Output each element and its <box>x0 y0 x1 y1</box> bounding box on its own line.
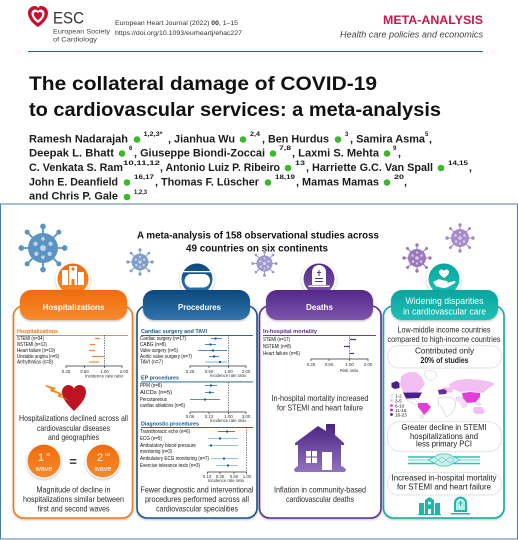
text: fewer procedures: procedures performed across all <box>145 495 249 504</box>
text: hospitalizations declined: Hospitalizations declined across all <box>19 414 128 423</box>
icon: stent <box>408 454 480 466</box>
text: comparison <box>388 326 500 344</box>
authors: Ramesh Nadarajah <box>29 134 128 146</box>
header bar: Widening disparities <box>406 296 484 306</box>
text: hospitalizations declined: and geographies <box>48 433 99 442</box>
second wave circle: nd <box>105 452 110 457</box>
forest plot: EP procedures: AICDs (n=5) <box>140 390 172 396</box>
forest plot: cardiac surgery and TAVI: Incidence rate ratio <box>210 373 247 378</box>
forest plot: EP procedures: 0.12 <box>205 414 214 419</box>
forest plot: diagnostic procedures: Ambulatory ECG monitoring (n=7) <box>140 456 209 462</box>
text: fewer procedures: cardiovascular specialities <box>156 504 238 514</box>
authors: , <box>469 162 472 174</box>
forest plot: cardiac surgery and TAVI: TAVI (n=7) <box>140 360 163 366</box>
forest plot: diagnostic procedures: Diagnostic procedures <box>141 422 199 428</box>
forest plot: EP procedures: 1.00 <box>224 414 233 419</box>
callout: contributed only: Contributed only <box>415 346 475 356</box>
forest plot: cardiac surgery and TAVI: 2.00 <box>242 369 251 374</box>
text: comparison: Low-middle income countries <box>398 326 490 334</box>
icon: hospital <box>56 262 90 296</box>
journal citation: European Heart Journal (2022) 00, 1–15 <box>115 20 239 27</box>
authors: 20 <box>394 175 405 181</box>
forest plot: diagnostic procedures: Incidence rate ratio <box>208 478 245 483</box>
text: in-hospital mortality increased: for STEMI and heart failure <box>277 404 363 412</box>
article type <box>340 15 483 40</box>
authors: 18,19 <box>275 175 296 181</box>
forest plot: hospitalizations: STEMI (n=34) <box>17 336 44 342</box>
forest plot: diagnostic procedures <box>140 422 253 483</box>
authors: , Samira Asma <box>350 134 425 146</box>
map legend: 16-23 <box>395 412 407 417</box>
authors: , <box>404 176 407 188</box>
callout: contributed only: 20% of studies <box>420 356 469 365</box>
forest plot: cardiac surgery and TAVI: 1.00 <box>224 369 233 374</box>
forest plot: cardiac surgery and TAVI: Valve surgery (n=5) <box>140 348 178 354</box>
forest plot: cardiac surgery and TAVI: Aortic valve surgery (n=7) <box>140 354 192 360</box>
icon: hospital teal <box>418 497 441 515</box>
authors <box>29 132 472 202</box>
panel: hospitalizations <box>14 262 132 518</box>
authors: , <box>429 134 432 146</box>
world map <box>392 370 495 418</box>
forest plot: cardiac surgery and TAVI: CABG (n=8) <box>140 342 166 348</box>
forest plot: in-hospital mortality: 0.25 <box>307 362 316 367</box>
forest plot: in-hospital mortality: NSTEMI (n=8) <box>263 344 291 350</box>
title <box>29 73 441 121</box>
first wave circle: 1 <box>38 452 44 464</box>
map legend: 1-2 <box>395 393 402 398</box>
forest plot: hospitalizations: Arrhythmias (n=8) <box>17 360 53 366</box>
text: hospitalizations declined <box>19 414 128 442</box>
header bar <box>20 290 127 320</box>
authors: , Harriette G.C. Van Spall <box>306 162 433 174</box>
forest plot: diagnostic procedures: Exercise tolerance tests (n=3) <box>140 463 200 469</box>
authors: , Antonio Luiz P. Ribeiro <box>160 162 281 174</box>
authors: 16,17 <box>134 175 155 181</box>
callout: greater decline: Greater decline in STEMI <box>402 423 486 432</box>
article type: META-ANALYSIS <box>383 15 483 27</box>
forest plot: EP procedures: PPM (n=8) <box>140 383 162 389</box>
forest plot: in-hospital mortality: STEMI (n=17) <box>263 337 290 343</box>
authors: 7,8 <box>279 146 292 152</box>
graphical abstract frame <box>0 204 518 539</box>
icon: heart with lightning bolt <box>45 385 86 411</box>
text: community deaths: cardiovascular deaths <box>286 495 354 504</box>
text: community deaths: Inflation in community-based <box>274 486 366 494</box>
header: ESC logo <box>28 6 111 44</box>
authors: 5 <box>425 132 429 138</box>
authors: , Mamas Mamas <box>296 176 379 188</box>
title: The collateral damage of COVID-19 <box>29 73 377 95</box>
panel: procedures <box>137 262 257 518</box>
forest plot: cardiac surgery and TAVI: 0.50 <box>205 369 214 374</box>
heading: A meta-analysis of 158 observational studies across <box>137 230 379 242</box>
authors: Deepak L. Bhatt <box>29 148 114 160</box>
forest plot: EP procedures <box>140 376 253 423</box>
authors: 14,15 <box>448 161 469 167</box>
journal citation: https://doi.org/10.1093/eurheartj/ehac227 <box>115 30 243 37</box>
forest plot: diagnostic procedures: Ambulatory blood pressure <box>140 443 196 449</box>
panel: widening disparities <box>384 262 504 518</box>
forest plot: cardiac surgery and TAVI <box>140 329 253 378</box>
text: magnitude of decline: Magnitude of decline in <box>36 486 111 494</box>
forest plot: diagnostic procedures: ECG (n=9) <box>140 436 162 442</box>
forest plot: hospitalizations: Unstable angina (n=9) <box>17 354 59 360</box>
forest plot: diagnostic procedures: monitoring (n=3) <box>140 449 172 455</box>
authors: 1,2,3* <box>144 132 163 138</box>
forest plot: diagnostic procedures: 1.00 <box>243 474 252 479</box>
forest plot: EP procedures: Percutaneous <box>140 397 167 403</box>
forest plot: hospitalizations: 0.50 <box>80 369 89 374</box>
text: community deaths <box>274 486 366 504</box>
journal citation <box>115 20 243 37</box>
second wave circle: wave <box>94 464 111 473</box>
map legend: 6-10 <box>395 403 405 408</box>
authors: 3 <box>345 132 349 138</box>
header: ESC logo: ESC <box>53 8 84 28</box>
forest plot: EP procedures: 0.06 <box>186 414 195 419</box>
header bar: Deaths <box>306 302 333 312</box>
authors: 9 <box>393 146 397 152</box>
authors: and Chris P. Gale <box>29 190 118 202</box>
forest plot: hospitalizations: 0.25 <box>62 369 71 374</box>
text: in-hospital mortality increased <box>272 394 369 412</box>
header: ESC logo: European Society <box>53 28 111 36</box>
icon: hand holding heart <box>426 262 462 296</box>
forest plot: in-hospital mortality <box>263 329 376 373</box>
forest plot: hospitalizations: Hospitalizations <box>17 329 58 335</box>
text: magnitude of decline <box>23 486 124 514</box>
authors: , Laxmi S. Mehta <box>292 148 379 160</box>
callout: increased mortality <box>388 472 502 495</box>
forest plot: diagnostic procedures: 0.13 <box>203 474 212 479</box>
authors: , Thomas F. Lüscher <box>155 176 259 188</box>
callout: increased mortality: Increased in-hospital mortality <box>392 474 497 482</box>
text: hospitalizations declined: cardiovascular diseases <box>37 424 110 433</box>
forest plot: hospitalizations: Heart failure (n=19) <box>17 348 55 354</box>
header bar <box>391 290 498 320</box>
header: ESC logo: of Cardiology <box>53 36 98 44</box>
authors: , Jianhua Wu <box>168 134 235 146</box>
text: magnitude of decline: first and second waves <box>38 504 110 514</box>
forest plot: EP procedures: cardiac ablations (n=5) <box>140 403 185 409</box>
map legend <box>390 393 407 417</box>
forest plot: EP procedures: EP procedures <box>141 376 179 382</box>
icon: small blue virus <box>126 248 154 276</box>
forest plot: hospitalizations: NSTEMI (n=12) <box>17 342 47 348</box>
heading <box>137 230 379 254</box>
icon: catheter <box>180 262 214 296</box>
callout: increased mortality: for STEMI and heart failure <box>397 482 491 492</box>
forest plot: hospitalizations: 2.00 <box>120 369 129 374</box>
forest plot: in-hospital mortality: Heart failure (n=6) <box>263 351 300 357</box>
text: magnitude of decline: hospitalizations similar between <box>23 495 124 504</box>
forest plot: diagnostic procedures: 0.25 <box>216 474 225 479</box>
forest plot: hospitalizations: Incidence rate ratio <box>85 374 124 378</box>
authors: 6 <box>129 146 133 152</box>
first wave circle: st <box>46 452 50 457</box>
heading: 49 countries on six continents <box>186 242 328 254</box>
icon: purple virus <box>445 223 475 253</box>
header bar <box>143 290 250 320</box>
first wave circle <box>27 444 61 478</box>
map legend: 3-5 <box>395 398 402 403</box>
forest plot: in-hospital mortality: 2.00 <box>364 362 373 367</box>
forest plot: in-hospital mortality: Risk ratio <box>340 368 359 373</box>
authors: , Ben Hurdus <box>262 134 329 146</box>
text: comparison: compared to high-income countries <box>388 335 500 344</box>
authors: 13 <box>295 161 306 167</box>
forest plot: in-hospital mortality: 1.00 <box>345 362 354 367</box>
text: fewer procedures <box>140 486 254 514</box>
forest plot: hospitalizations: 1.00 <box>100 369 109 374</box>
panel: deaths <box>260 262 381 518</box>
header bar: in cardiovascular care <box>403 306 486 316</box>
text: in-hospital mortality increased: In-hospital mortality increased <box>272 394 369 403</box>
authors: 10,11,12 <box>123 161 161 167</box>
authors: , <box>398 148 401 160</box>
forest plot: in-hospital mortality: In-hospital mortality <box>263 329 318 335</box>
icon: house <box>294 424 346 472</box>
map legend: 11-15 <box>395 408 407 413</box>
forest plot: EP procedures: Incidence rate ratio <box>210 418 247 423</box>
authors: , Giuseppe Biondi-Zoccai <box>134 148 265 160</box>
icon: small periwinkle virus <box>251 250 278 277</box>
icon: purple virus lower <box>402 243 432 273</box>
forest plot: hospitalizations <box>16 329 129 378</box>
callout: greater decline: hospitalizations and <box>410 432 478 441</box>
forest plot: diagnostic procedures: Transthoracic echo (n=6) <box>140 429 190 435</box>
header bar: Procedures <box>178 302 221 312</box>
equals sign: = <box>69 454 77 469</box>
second wave circle <box>86 444 120 478</box>
icon: tombstone teal <box>451 497 470 514</box>
callout: greater decline <box>388 422 502 452</box>
forest plot: cardiac surgery and TAVI: Cardiac surgery (n=17) <box>140 336 186 342</box>
header bar <box>266 290 373 320</box>
callout: greater decline: less primary PCI <box>416 440 472 448</box>
icon: large virus <box>18 224 68 272</box>
forest plot: cardiac surgery and TAVI: Cardiac surgery and TAVI <box>141 329 207 335</box>
forest plot: diagnostic procedures: 0.50 <box>230 474 239 479</box>
article type: Health care policies and economics <box>340 30 483 40</box>
authors: 1,2,3 <box>134 190 148 196</box>
callout: contributed only <box>388 346 502 368</box>
authors: John E. Deanfield <box>29 176 118 188</box>
authors: C. Venkata S. Ram <box>29 162 123 174</box>
forest plot: EP procedures: 3.00 <box>242 414 251 419</box>
first wave circle: wave <box>35 464 52 473</box>
forest plot: cardiac surgery and TAVI: 0.25 <box>186 369 195 374</box>
icon: tombstone <box>302 262 336 296</box>
second wave circle: 2 <box>97 452 103 464</box>
authors: 2,4 <box>250 132 261 138</box>
text: fewer procedures: Fewer diagnostic and interventional <box>140 486 254 494</box>
header bar: Hospitalizations <box>42 302 105 312</box>
title: to cardiovascular services: a meta-analysis <box>29 99 441 121</box>
forest plot: in-hospital mortality: 0.50 <box>325 362 334 367</box>
